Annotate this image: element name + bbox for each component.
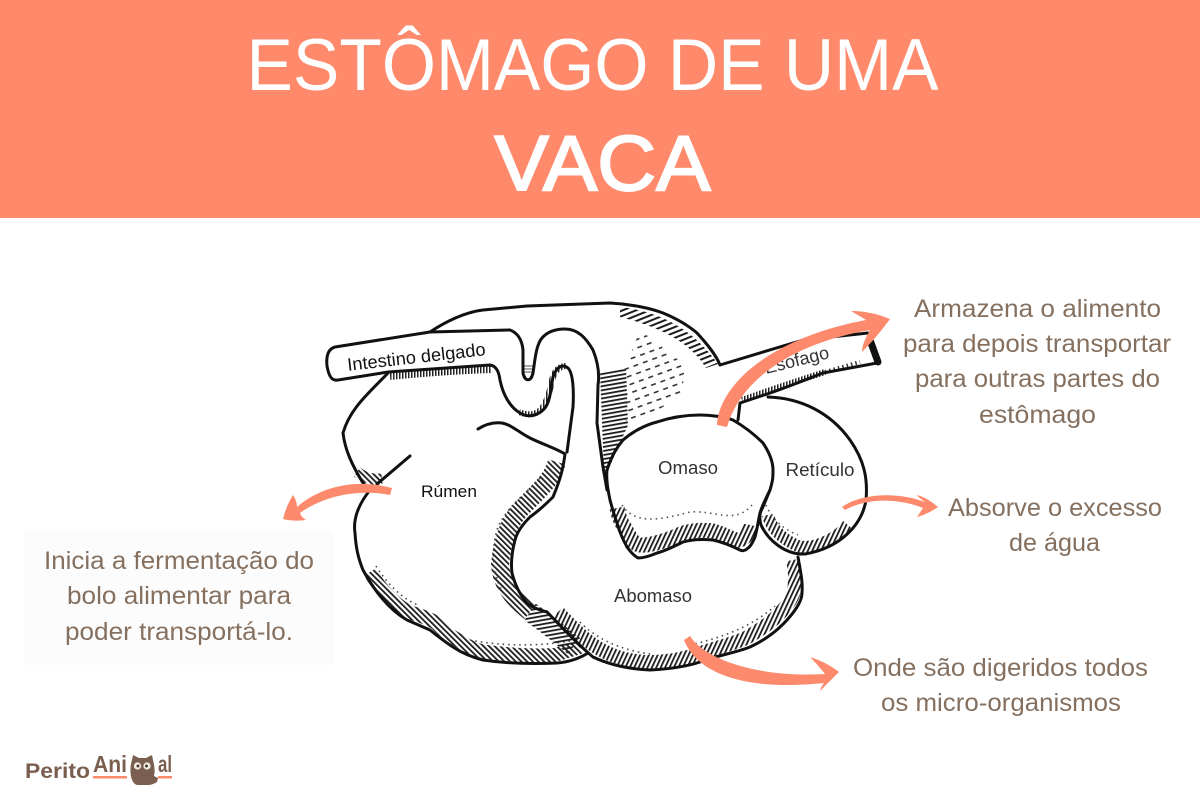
arrow: rumen to left text — [283, 484, 392, 521]
text: storage — [903, 295, 1171, 429]
title: VACA — [494, 119, 710, 207]
omasum hatching — [617, 505, 752, 545]
icon: cat — [130, 755, 158, 785]
arrow: abomasum to bottom text — [684, 636, 839, 691]
esophagus hatching — [742, 362, 860, 400]
arrow: omasum to top right text — [717, 311, 890, 427]
label: rumen: Rúmen — [421, 482, 477, 501]
text: water absorption: de água — [1009, 529, 1100, 557]
text: storage: para outras partes do — [915, 365, 1160, 393]
title — [246, 25, 939, 207]
logo: Perito Animal: al — [158, 751, 172, 777]
text: storage: para depois transportar — [903, 330, 1171, 358]
small intestine hatching — [390, 366, 566, 414]
label: abomasum: Abomaso — [614, 586, 692, 606]
outlines — [327, 303, 878, 670]
esophagus outline — [720, 333, 868, 365]
logo: Perito Animal: Ani — [93, 751, 127, 777]
panel: left text background — [24, 530, 334, 665]
reticulum outline — [760, 397, 866, 554]
small intestine outline — [430, 329, 607, 490]
label: small intestine: Intestino delgado — [346, 339, 487, 375]
diagram: cow stomach — [327, 303, 878, 670]
text: fermentation — [44, 547, 314, 646]
abomasum hatching — [558, 560, 795, 662]
text: fermentation: poder transportá-lo. — [65, 618, 293, 646]
text: digestion: Onde são digeridos todos — [853, 654, 1148, 682]
text: digestion: os micro-organismos — [881, 689, 1121, 717]
omasum outline — [607, 415, 773, 558]
text: storage: Armazena o alimento — [914, 295, 1161, 323]
title: ESTÔMAGO DE UMA — [246, 25, 939, 106]
text: water absorption: Absorve o excesso — [948, 494, 1162, 522]
rumen outline — [430, 303, 720, 365]
text: water absorption — [948, 494, 1162, 557]
logo: Perito Animal — [25, 751, 172, 785]
text: storage: estômago — [979, 401, 1096, 429]
text: fermentation: bolo alimentar para — [67, 582, 291, 610]
label: reticulum: Retículo — [786, 460, 854, 480]
logo: Perito Animal: Perito — [25, 760, 90, 783]
label: omasum: Omaso — [658, 458, 718, 478]
text: fermentation: Inicia a fermentação do — [44, 547, 314, 575]
neck hatching — [600, 307, 718, 472]
rumen hatching — [357, 462, 580, 656]
text: digestion — [853, 654, 1148, 717]
header band — [0, 0, 1200, 218]
label: esophagus: Esofago — [762, 342, 831, 378]
reticulum hatching — [766, 505, 848, 547]
arrow: reticulum to right text — [842, 495, 938, 517]
